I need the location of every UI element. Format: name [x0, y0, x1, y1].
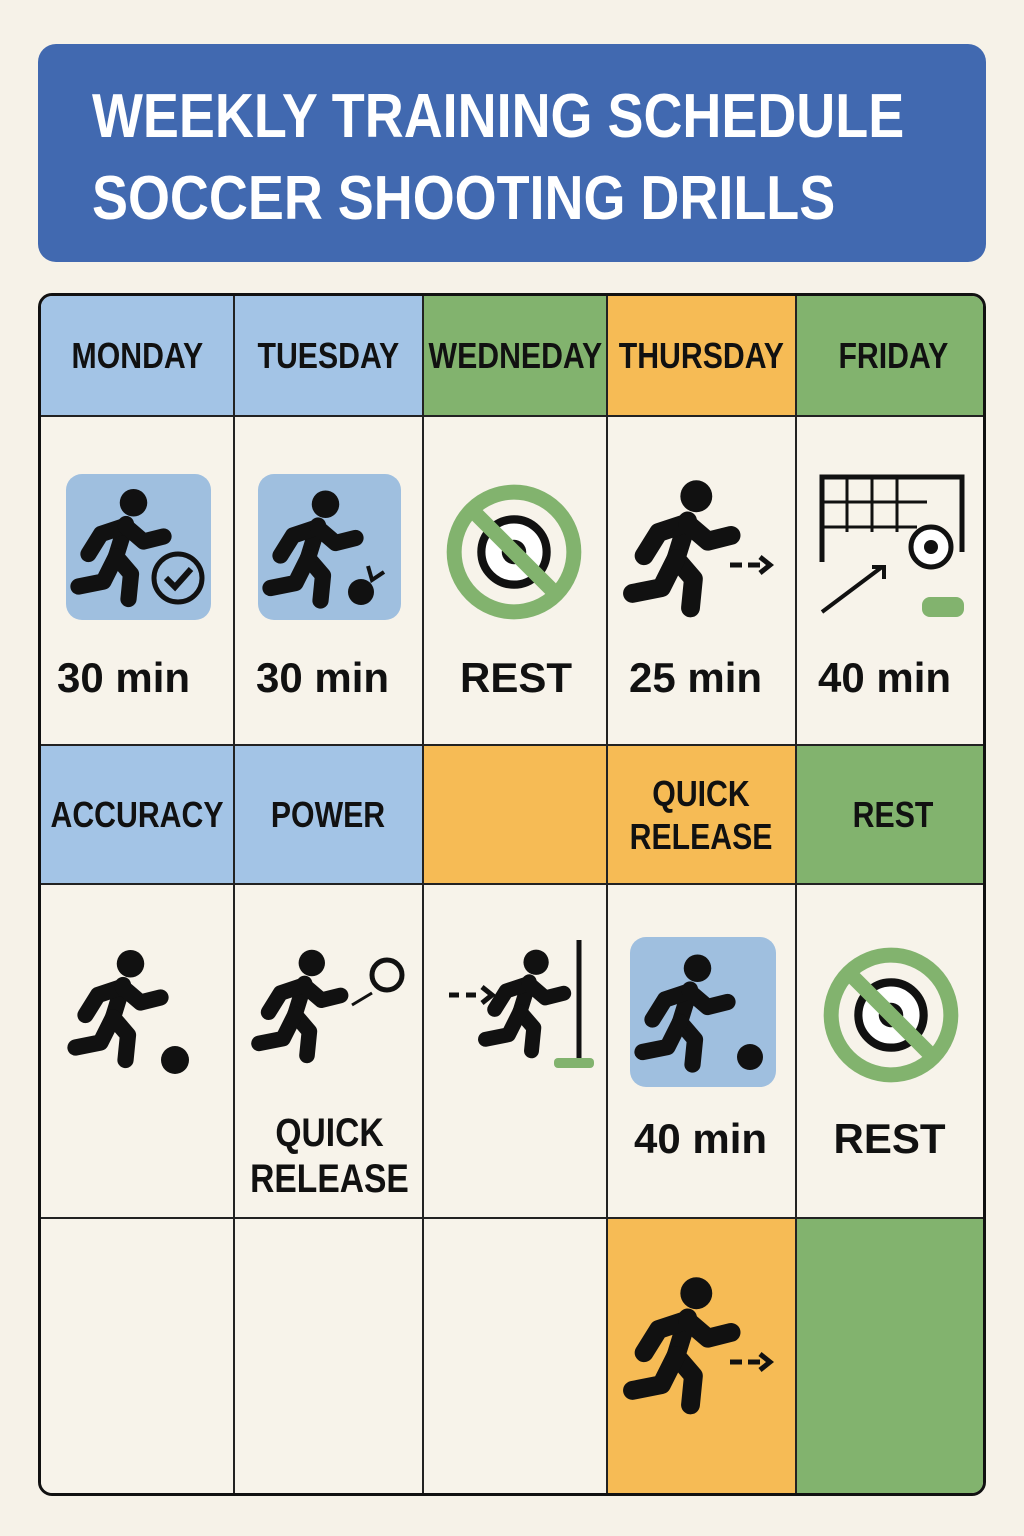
icon: runner sprint: [623, 1277, 774, 1414]
row 1 headers: [41, 296, 235, 417]
row 5 cells: [41, 1219, 235, 1499]
row 3 labels: [41, 746, 235, 885]
row 3 labels: ACCURACY: [50, 794, 224, 835]
icon: runner kicking: [251, 950, 404, 1064]
schedule grid: 30 min: [256, 654, 389, 701]
schedule grid: TUESDAY: [258, 335, 399, 376]
icon: runner blue: [630, 937, 776, 1087]
title: [38, 44, 986, 262]
schedule grid: [38, 293, 986, 1496]
schedule grid: QUICK: [653, 772, 750, 814]
schedule grid: THURSDAY: [619, 335, 784, 376]
schedule grid: 40 min: [634, 1115, 767, 1162]
icon: rest: [446, 484, 582, 620]
schedule grid: RELEASE: [630, 816, 773, 856]
schedule grid: WEDNEDAY: [428, 335, 602, 376]
icon: goal: [820, 474, 964, 617]
schedule grid: 25 min: [629, 654, 762, 701]
schedule grid: REST: [833, 1115, 946, 1162]
schedule grid: REST: [460, 654, 572, 701]
icon: runner accuracy: [66, 474, 211, 620]
text: [250, 1111, 409, 1201]
row 1 headers: MONDAY: [71, 335, 203, 376]
title: SOCCER SHOOTING DRILLS: [92, 164, 835, 233]
icon: runner power: [258, 474, 401, 620]
text: 30 min: [57, 654, 190, 701]
icon: rest: [824, 948, 958, 1082]
schedule grid: FRIDAY: [838, 335, 948, 376]
schedule grid: POWER: [271, 794, 386, 835]
row 4 cells: [41, 885, 235, 1219]
icon: runner sprint: [623, 480, 774, 618]
text: QUICK: [275, 1111, 384, 1155]
icon: runner to post: [449, 940, 594, 1068]
text: RELEASE: [250, 1157, 409, 1201]
schedule grid: 40 min: [818, 654, 951, 701]
title: WEEKLY TRAINING SCHEDULE: [92, 82, 904, 151]
icon: runner with ball: [67, 950, 189, 1074]
schedule grid: REST: [853, 794, 933, 835]
row 2 cells: [41, 417, 235, 746]
